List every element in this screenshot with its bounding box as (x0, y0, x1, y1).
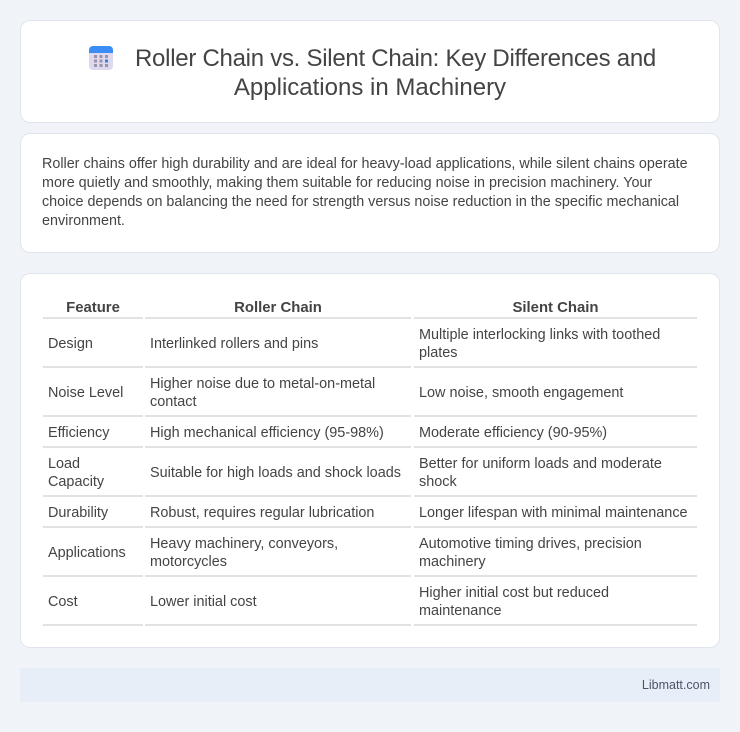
row: cost (48, 585, 609, 619)
row: efficiency: Efficiency (48, 425, 109, 441)
row: applications: Heavy machinery, conveyors, (150, 536, 338, 552)
row: efficiency: High mechanical efficiency (95-98%) (150, 425, 384, 441)
row: efficiency: Moderate efficiency (90-95%) (419, 425, 607, 441)
row: design: plates (419, 345, 457, 361)
footer credit: Libmatt.com (642, 678, 710, 692)
row: noise level: contact (150, 394, 196, 410)
row: durability: Robust, requires regular lubrication (150, 505, 374, 521)
row: cost: Cost (48, 594, 78, 610)
comparison table card (20, 273, 720, 648)
intro paragraph: choice depends on balancing the need for strength versus noise reduction in the specific mechanical (42, 194, 679, 210)
row: load capacity: Suitable for high loads and shock loads (150, 465, 401, 481)
row: design: Design (48, 336, 93, 352)
row: durability: Longer lifespan with minimal maintenance (419, 505, 688, 521)
row: applications: motorcycles (150, 554, 227, 570)
row: noise level: Higher noise due to metal-on-metal (150, 376, 375, 392)
row: efficiency (48, 425, 607, 441)
row: load capacity: Capacity (48, 474, 104, 490)
header card (20, 20, 720, 123)
row: load capacity: Load (48, 456, 80, 472)
title (135, 45, 656, 101)
row: durability: Durability (48, 505, 108, 521)
row: design (48, 327, 660, 361)
row: load capacity: shock (419, 474, 457, 490)
header row: Silent Chain (512, 300, 599, 316)
row: cost: Higher initial cost but reduced (419, 585, 609, 601)
intro paragraph: more quietly and smoothly, making them suitable for reducing noise in precision machinery. Your (42, 175, 652, 191)
title: Roller Chain vs. Silent Chain: Key Differences and (135, 45, 656, 72)
header row: Feature (66, 300, 120, 316)
header row: Roller Chain (234, 300, 322, 316)
intro paragraph (42, 156, 688, 229)
row: load capacity (48, 456, 662, 490)
row: applications (48, 536, 642, 570)
intro text card (20, 133, 720, 253)
row: durability (48, 505, 688, 521)
row: noise level: Noise Level (48, 385, 123, 401)
row: design: Interlinked rollers and pins (150, 336, 318, 352)
row: applications: machinery (419, 554, 486, 570)
header row (66, 300, 599, 316)
row: cost: Lower initial cost (150, 594, 257, 610)
icon: calendar (89, 46, 113, 70)
row: noise level: Low noise, smooth engagement (419, 385, 623, 401)
row: cost: maintenance (419, 603, 502, 619)
intro paragraph: Roller chains offer high durability and are ideal for heavy-load applications, while silent chains operate (42, 156, 688, 172)
row: applications: Automotive timing drives, precision (419, 536, 642, 552)
row: design: Multiple interlocking links with toothed (419, 327, 660, 343)
row: applications: Applications (48, 545, 126, 561)
row: noise level (48, 376, 624, 410)
title: Applications in Machinery (234, 74, 506, 101)
intro paragraph: environment. (42, 213, 125, 229)
footer bar (20, 668, 720, 702)
row: load capacity: Better for uniform loads and moderate (419, 456, 662, 472)
